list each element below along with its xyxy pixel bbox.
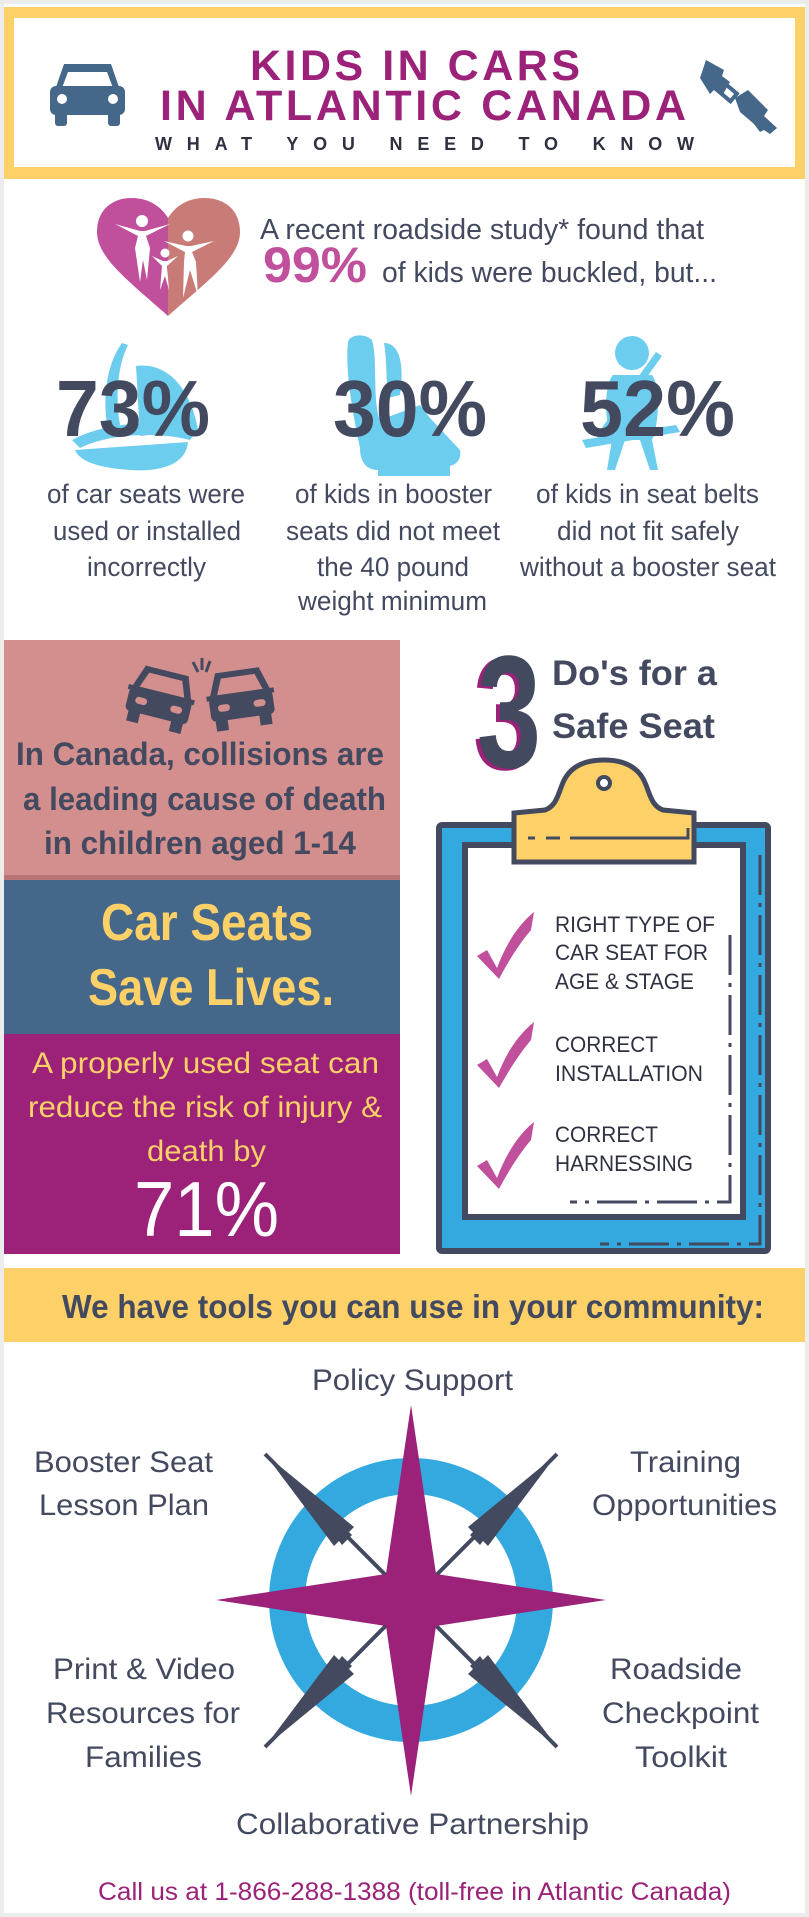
stat: 52% seat belts: of kids in seat belts [536, 479, 759, 509]
stat: 30% booster: 30% [333, 364, 487, 453]
stat: 73% car seats: used or installed [53, 516, 241, 546]
tool labels: Opportunities [592, 1489, 777, 1522]
check item 2 [477, 1022, 703, 1088]
check item 1 [477, 912, 715, 994]
tools banner: We have tools you can use in your community: [62, 1288, 764, 1325]
check item 1: RIGHT TYPE OF [555, 912, 715, 937]
panel: 71% reduction: reduce the risk of injury & [28, 1091, 382, 1124]
tool labels: Training [630, 1446, 741, 1479]
tool labels: Toolkit [635, 1741, 728, 1774]
panel: car seats save lives: Save Lives. [88, 959, 334, 1017]
icon: car [50, 64, 125, 126]
title [155, 42, 694, 154]
heading: 3 do's [473, 622, 718, 803]
tool labels: Checkpoint [602, 1697, 760, 1730]
tool labels: Resources for [46, 1697, 240, 1730]
clipboard checklist [439, 760, 768, 1251]
stat: 73% car seats [47, 343, 245, 582]
stat: 52% seat belts [519, 336, 776, 582]
panel: collisions: in children aged 1-14 [44, 825, 356, 861]
stat: 30% booster: of kids in booster [295, 479, 492, 509]
intro: heart with family [97, 198, 240, 316]
intro text: 99% [263, 237, 367, 293]
panel: collisions: a leading cause of death [23, 781, 386, 817]
icon: clip [514, 760, 694, 862]
intro text: of kids were buckled, but... [382, 257, 717, 289]
panel: 71% reduction: 71% [134, 1165, 279, 1253]
title: IN ATLANTIC CANADA [160, 82, 686, 130]
tools banner [4, 1268, 805, 1342]
stat: 73% car seats: incorrectly [87, 552, 206, 582]
check item 3: HARNESSING [555, 1151, 693, 1176]
check item 1: CAR SEAT FOR [555, 940, 708, 965]
check item 3: CORRECT [555, 1122, 658, 1147]
header banner [4, 7, 805, 179]
icon: infant carrier [72, 343, 198, 470]
panel: 71% reduction: death by [147, 1135, 266, 1168]
icon: booster seat [347, 335, 460, 476]
tool labels: Families [85, 1741, 202, 1774]
heading: 3 do's: Safe Seat [552, 707, 715, 746]
title: KIDS IN CARS [250, 42, 580, 90]
stat: 73% car seats: 73% [56, 364, 210, 453]
panel: 71% reduction: A properly used seat can [32, 1047, 379, 1080]
tool labels: Booster Seat [34, 1446, 214, 1479]
panel: collisions: In Canada, collisions are [16, 736, 384, 772]
check item 3 [477, 1122, 693, 1189]
heading: 3 do's: 3 [473, 624, 537, 803]
stat: 30% booster [286, 335, 500, 616]
stat: 73% car seats: of car seats were [47, 479, 245, 509]
compass diagram [216, 1405, 606, 1796]
stat: 52% seat belts: 52% [580, 364, 735, 453]
intro text: A recent roadside study* found that [260, 214, 704, 246]
tool labels: Roadside [610, 1653, 742, 1686]
stat: 30% booster: the 40 pound [317, 552, 469, 582]
tool labels [34, 1364, 777, 1841]
tool labels: Collaborative Partnership [236, 1808, 589, 1841]
tool labels: Print & Video [53, 1653, 235, 1686]
heading: 3 do's: Do's for a [552, 654, 718, 693]
panel: collisions [4, 640, 400, 880]
icon: child with seat belt [582, 336, 680, 470]
stat: 30% booster: seats did not meet [286, 516, 500, 546]
check item 1: AGE & STAGE [555, 969, 694, 994]
intro text [260, 214, 717, 293]
tool labels: Policy Support [312, 1364, 514, 1397]
icon: car crash [120, 658, 279, 735]
tool labels: Lesson Plan [39, 1489, 209, 1522]
check item 2: INSTALLATION [555, 1061, 703, 1086]
title: WHAT YOU NEED TO KNOW [155, 134, 694, 154]
check item 2: CORRECT [555, 1032, 658, 1057]
footer contact: Call us at 1-866-288-1388 (toll-free in Atlantic Canada) [98, 1878, 731, 1906]
stat: 52% seat belts: did not fit safely [557, 516, 739, 546]
panel: car seats save lives [4, 880, 400, 1034]
heading: 3 do's: 3 [477, 622, 541, 801]
stat: 30% booster: weight minimum [297, 586, 487, 616]
panel: 71% reduction [4, 1034, 400, 1254]
panel: car seats save lives: Car Seats [101, 894, 313, 952]
icon: seat belt buckle [700, 60, 777, 134]
stat: 52% seat belts: without a booster seat [519, 552, 776, 582]
